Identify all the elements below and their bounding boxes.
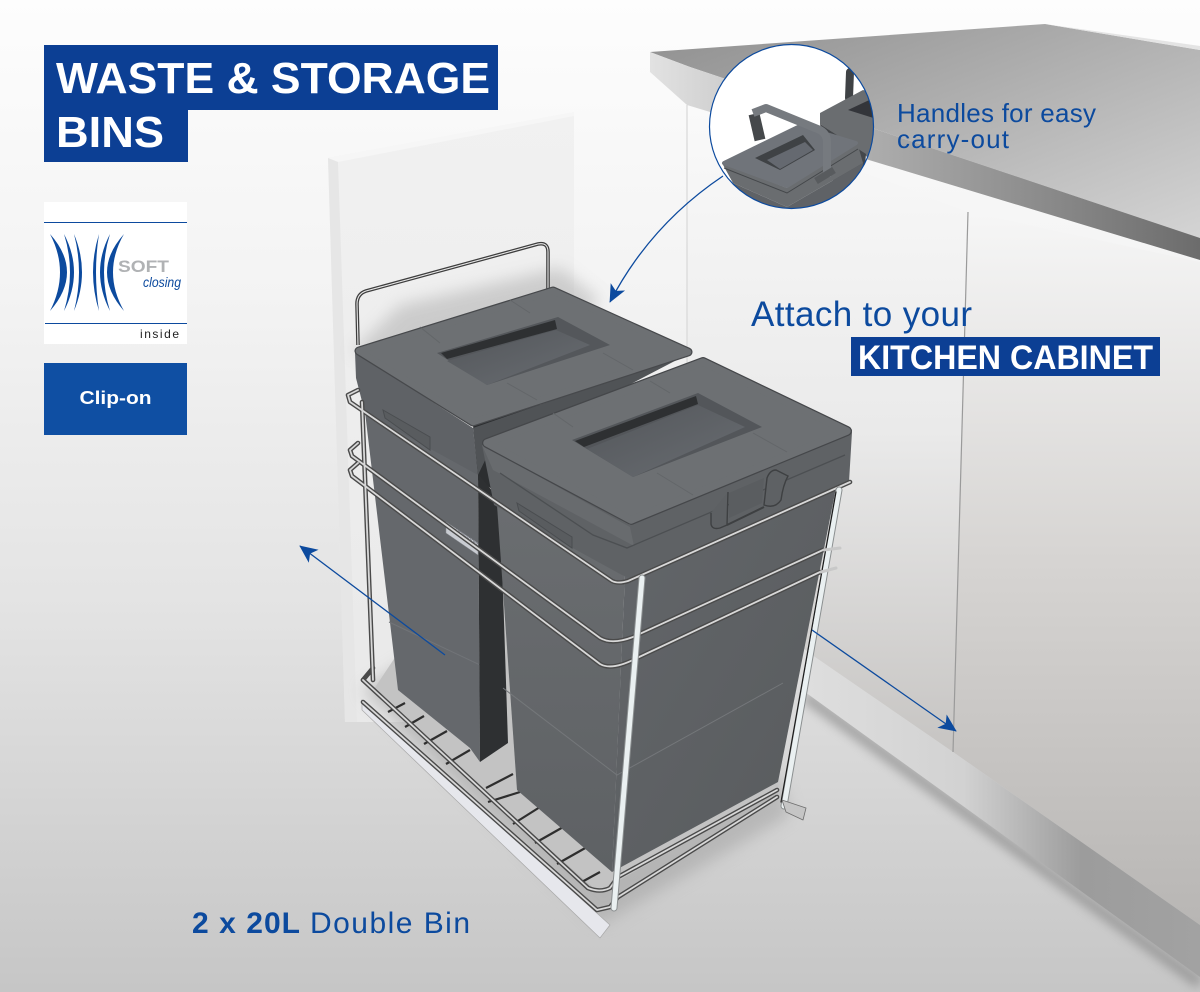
arrow: handle callout	[610, 176, 723, 302]
badge: soft closing	[44, 202, 187, 344]
text: handles: carry-out	[897, 124, 1010, 154]
back bin	[355, 291, 692, 762]
title: WASTE & STORAGE	[56, 54, 490, 103]
front bin	[482, 362, 852, 872]
label plate	[446, 522, 479, 555]
countertop	[650, 24, 1200, 260]
text: capacity: Double Bin	[310, 907, 470, 940]
title: BINS	[56, 108, 164, 157]
badge: soft closing: closing	[143, 274, 181, 290]
text: capacity: 2 x 20L	[192, 907, 300, 940]
base tray	[362, 650, 780, 938]
near bin in callout	[733, 163, 863, 208]
floor shadow	[362, 600, 790, 925]
badge: clip-on: Clip-on	[80, 388, 152, 408]
text: handles	[897, 98, 1096, 154]
wire back handle	[357, 244, 548, 345]
product: double bin pull-out	[348, 244, 852, 938]
arrow: to cabinet	[812, 630, 956, 731]
text: handles: Handles for easy	[897, 98, 1096, 128]
badge: soft closing: inside	[140, 327, 179, 341]
text: attach to your: Attach to your	[751, 295, 972, 334]
badge: soft closing: SOFT	[118, 257, 170, 276]
badge: clip-on	[44, 363, 187, 435]
cabinet	[687, 105, 1200, 983]
wire frame	[348, 390, 850, 910]
heading: kitchen cabinet: KITCHEN CABINET	[858, 339, 1153, 377]
title	[44, 45, 498, 162]
callout circle: handles	[710, 44, 880, 215]
second bin in callout	[849, 72, 850, 98]
text: capacity	[192, 907, 470, 940]
icon: soft closing arcs	[50, 234, 124, 311]
label plate: Unihopper	[453, 528, 479, 548]
arrow: rear	[300, 546, 445, 655]
side board	[328, 112, 574, 722]
